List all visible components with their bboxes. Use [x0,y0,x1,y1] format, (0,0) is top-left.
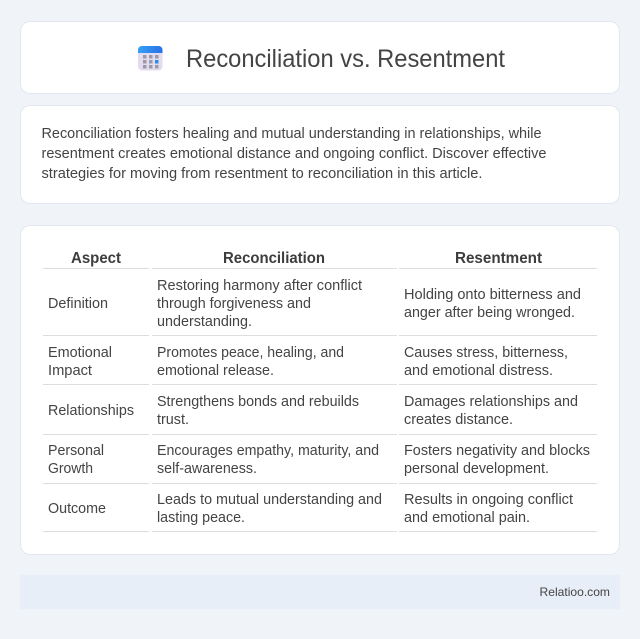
panel: table card [20,225,620,555]
table row: outcome: Results in ongoing conflict [404,492,573,508]
title: Reconciliation vs. Resentment [186,45,505,73]
icon: calendar [138,46,162,70]
table row: personal growth: Fosters negativity and blocks [404,443,590,459]
table row: definition: Restoring harmony after conflict [157,278,362,294]
table row: emotional impact: Impact [48,363,92,379]
table row: relationships: Relationships [48,403,134,419]
table row: relationships: Damages relationships and [404,394,578,410]
table row: outcome [43,492,597,532]
table row: outcome: Leads to mutual understanding and [157,492,382,508]
table row: definition: Holding onto bitterness and [404,287,581,303]
table row: personal growth: Growth [48,461,93,477]
table row: outcome: and emotional pain. [404,510,530,526]
table header: Reconciliation [223,250,325,267]
footer text: Relatioo.com [540,585,610,599]
table row: relationships: trust. [157,412,189,428]
table row: personal growth: self-awareness. [157,461,257,477]
panel: intro card [20,105,620,204]
table row: definition: through forgiveness and [157,296,311,312]
table row: emotional impact: emotional release. [157,363,274,379]
table row: definition: Definition [48,296,108,312]
table row: relationships: creates distance. [404,412,513,428]
table header [43,250,597,269]
table row: personal growth [43,443,597,484]
table row: relationships: Strengthens bonds and rebuilds [157,394,359,410]
table header: Aspect [71,250,122,267]
text block: intro: resentment creates emotional distance and ongoing conflict. Discover effective [42,146,546,162]
table row: emotional impact: Causes stress, bitterness, [404,345,568,361]
table row: personal growth: Encourages empathy, maturity, and [157,443,379,459]
panel: footer bar [20,575,620,609]
panel: title card [20,21,620,94]
table row: personal growth: Personal [48,443,104,459]
table row: emotional impact: Promotes peace, healing, and [157,345,344,361]
text block: intro: strategies for moving from resentment to reconciliation in this article. [42,166,482,182]
text block: intro [42,126,546,182]
table row: definition: anger after being wronged. [404,305,575,321]
table row: emotional impact: Emotional [48,345,112,361]
table row: relationships [43,394,597,435]
table row: definition [43,278,597,336]
table row: definition: understanding. [157,314,252,330]
table row: outcome: Outcome [48,501,106,517]
text block: intro: Reconciliation fosters healing and mutual understanding in relationships, while [42,126,542,142]
table row: emotional impact: and emotional distress. [404,363,553,379]
table row: emotional impact [43,345,597,385]
table row: personal growth: personal development. [404,461,549,477]
table row: outcome: lasting peace. [157,510,245,526]
table header: Resentment [455,250,543,267]
